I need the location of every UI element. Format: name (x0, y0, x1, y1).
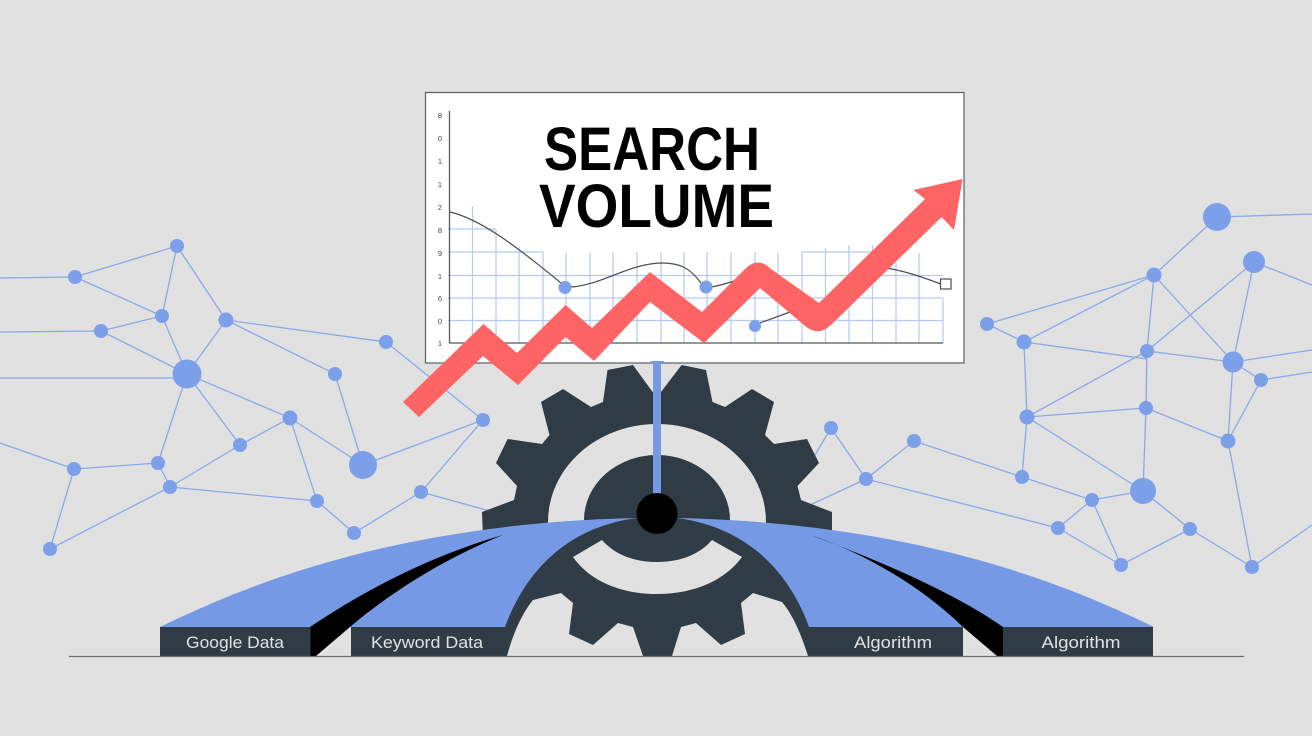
title (539, 115, 774, 240)
y axis labels (438, 111, 442, 348)
label box: Algorithm centre (809, 627, 963, 656)
label box: Google Data (160, 627, 310, 656)
search volume trend line (450, 212, 941, 323)
panel: search volume chart (426, 92, 964, 363)
ground line (69, 656, 1244, 658)
y axis labels: 8 (438, 111, 442, 120)
gear upper body (482, 365, 832, 540)
gauge hub (636, 493, 678, 534)
blue data dome (160, 518, 1154, 627)
chart data points (558, 280, 761, 332)
gear ring (548, 424, 766, 530)
title: VOLUME (539, 172, 774, 240)
label box: Google Data: Google Data (186, 634, 285, 652)
chart end marker (940, 279, 951, 289)
y axis labels: 1 (438, 180, 442, 189)
y axis labels: 8 (438, 226, 442, 235)
arch body (505, 518, 809, 656)
chart axes (450, 111, 943, 343)
black wedge right (810, 535, 1003, 656)
panel background (426, 92, 964, 363)
network nodes right (824, 203, 1268, 574)
gear (482, 365, 832, 540)
black wedge left (310, 535, 503, 656)
title: SEARCH (544, 115, 760, 183)
gear eye crescent (573, 540, 742, 594)
network: left (0, 239, 497, 556)
label box: Algorithm right (1003, 627, 1153, 656)
network links right (810, 214, 1312, 567)
y axis labels: 0 (438, 317, 442, 326)
y axis labels: 9 (438, 249, 442, 258)
arch with lower gear (505, 518, 809, 656)
y axis labels: 1 (438, 339, 442, 348)
y axis labels: 2 (438, 203, 442, 212)
lower gear gaps (507, 593, 808, 656)
y axis labels: 1 (438, 157, 442, 166)
network links left (0, 246, 497, 549)
y axis labels: 0 (438, 134, 442, 143)
y axis labels: 1 (438, 272, 442, 281)
vertical gauge needle (650, 361, 664, 495)
label box: Algorithm right: Algorithm (1042, 634, 1120, 652)
network: right (810, 203, 1312, 574)
network nodes left (43, 239, 490, 556)
label box: Keyword Data (351, 627, 506, 656)
red growth arrow (403, 179, 963, 417)
label box: Keyword Data: Keyword Data (371, 634, 484, 652)
label box: Algorithm centre: Algorithm (854, 634, 932, 652)
y axis labels: 6 (438, 294, 442, 303)
chart grid (448, 206, 943, 343)
